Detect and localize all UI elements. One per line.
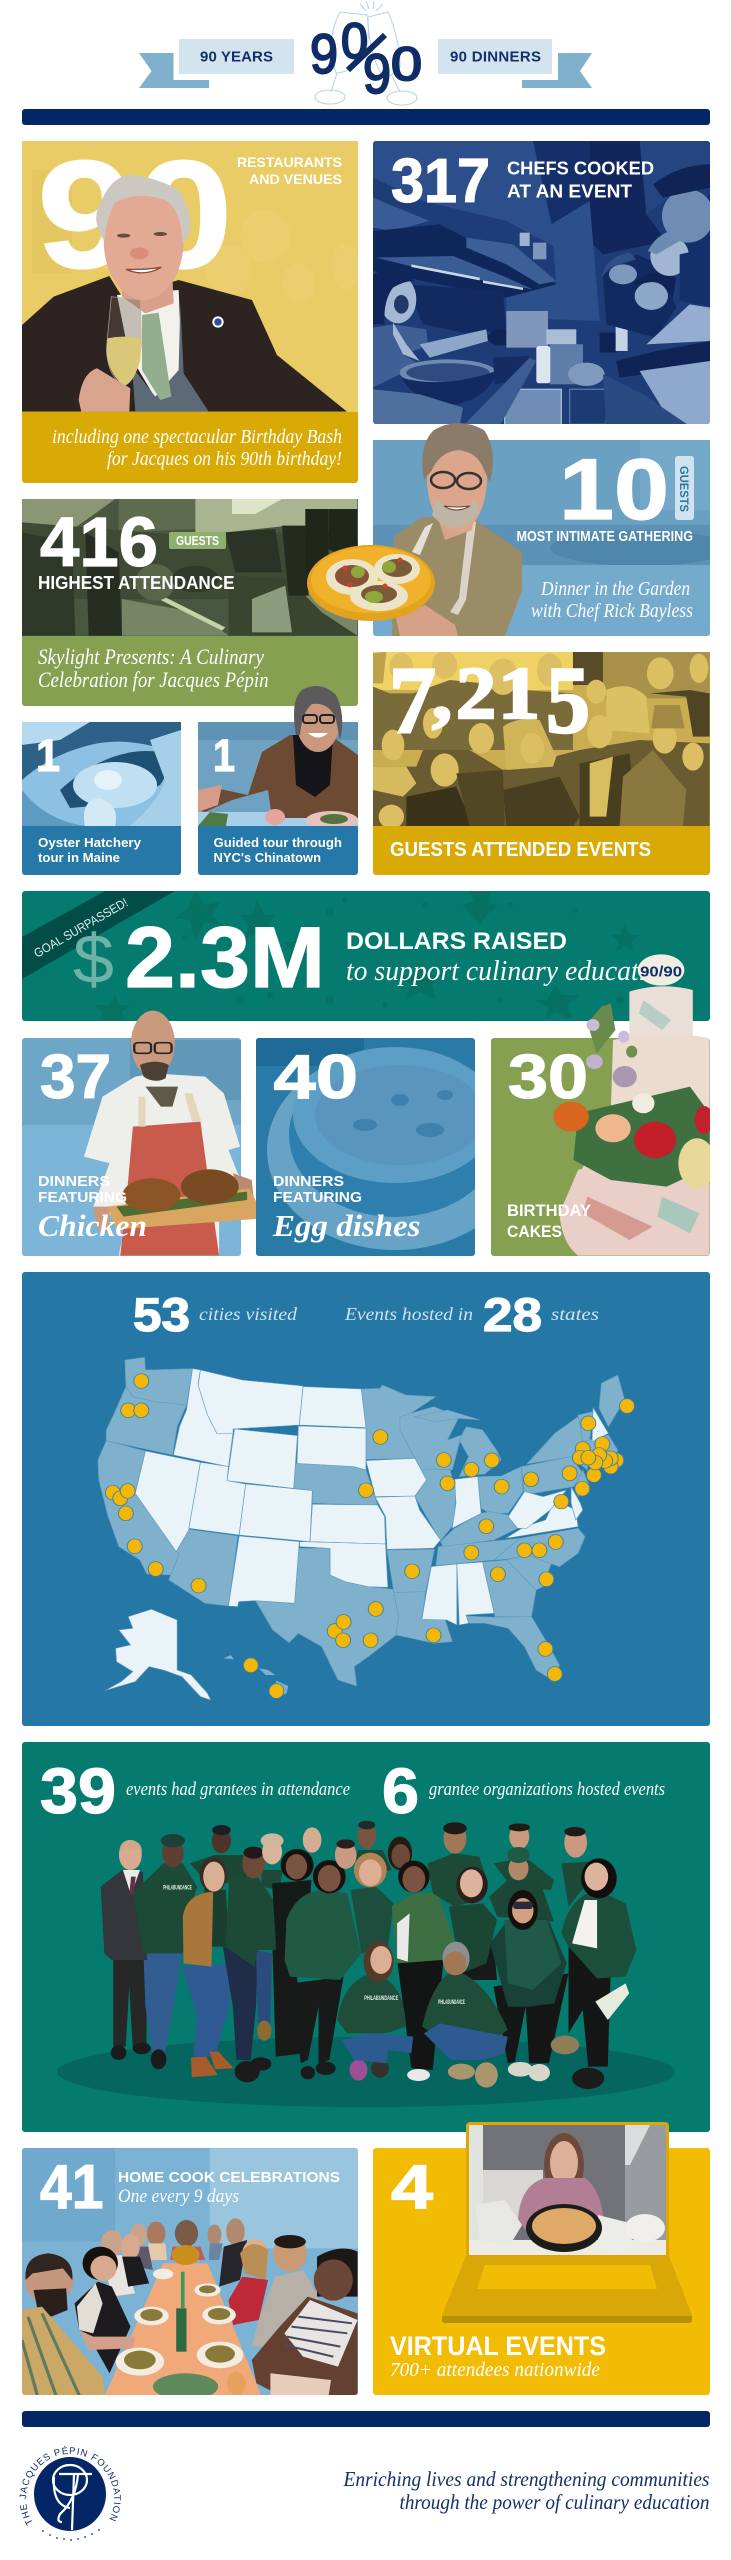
panel: grantees — [22, 1742, 710, 2132]
label: birthday cakes — [507, 1202, 591, 1241]
label: dinners featuring egg dishes: Egg dishes — [272, 1208, 420, 1243]
panel: 10 most intimate gathering — [307, 423, 730, 636]
suit — [101, 1870, 147, 1960]
panel: 416 highest attendance: 416 — [40, 503, 158, 581]
number: 7,215 — [389, 647, 590, 753]
unvisited states — [105, 1369, 608, 1700]
panel: 2.3M dollars raised — [22, 891, 710, 1021]
text: dinner in the garden: with Chef Rick Bayless — [531, 600, 693, 622]
label: restaurants and venues — [237, 154, 342, 187]
hand — [79, 368, 130, 412]
table — [105, 2263, 261, 2395]
neck and head — [122, 281, 174, 314]
photo background — [22, 141, 358, 412]
caption: oyster hatchery tour: Oyster Hatchery — [38, 836, 141, 850]
containers — [506, 311, 548, 348]
person: woman in leopard coat — [198, 686, 358, 829]
laptop screen: cooking demo — [469, 2125, 666, 2255]
trays — [505, 389, 561, 426]
footer: skylight presents: Skylight Presents: A Culinary — [38, 644, 264, 669]
banner: goal surpassed — [22, 891, 175, 979]
woman — [373, 324, 428, 388]
stat: 39 events: events had grantees in attendance — [126, 1779, 350, 1800]
group photo: PHILABUNDANCE — [438, 1999, 465, 2006]
panel: 2.3M dollars raised: DOLLARS RAISED — [346, 928, 567, 955]
footer: skylight presents — [22, 636, 358, 706]
panel: 41 home cook celebrations — [22, 2148, 359, 2400]
label: virtual events — [390, 2331, 606, 2381]
floor shadow — [57, 2037, 675, 2107]
stats row — [133, 1288, 599, 1341]
dinner party photo — [22, 2148, 359, 2400]
label: dinners featuring egg dishes — [272, 1174, 420, 1243]
icon: champagne glasses — [315, 1, 417, 105]
ribbon tail: right — [522, 53, 592, 88]
panel: 40 dinners featuring egg dishes: 40 — [274, 1043, 358, 1112]
icon: taco plate — [307, 545, 435, 621]
bottom left counter — [373, 389, 463, 426]
panel: 90 restaurants and venues: 90 — [37, 129, 233, 300]
pin — [212, 316, 224, 328]
label: 90 years — [179, 39, 294, 74]
top divider bar — [22, 109, 710, 125]
tagline — [343, 2467, 710, 2514]
stat: 39 events — [40, 1755, 350, 1827]
map of states — [98, 1357, 634, 1700]
panel: 10 most intimate gathering: 10 — [559, 442, 669, 538]
number: 7,215: 1 — [498, 653, 540, 735]
label: birthday cakes: BIRTHDAY — [507, 1202, 591, 1220]
faint crowd — [205, 210, 359, 303]
logo: 90/90: 9 — [310, 22, 338, 85]
label: home cook celebrations: HOME COOK CELEBRATIONS — [118, 2169, 340, 2186]
tagline: Enriching lives and strengthening communities — [343, 2467, 710, 2491]
panel: 30 birthday cakes — [491, 954, 716, 1256]
label: birthday cakes: CAKES — [507, 1223, 562, 1241]
Hawaii — [273, 1681, 288, 1697]
label: restaurants and venues: RESTAURANTS — [237, 154, 342, 170]
panel: 416 highest attendance — [22, 499, 358, 706]
caption: guided tour — [198, 826, 358, 875]
label: dinners featuring chicken: FEATURING — [38, 1190, 127, 1206]
stat: 39 events: 39 — [40, 1755, 116, 1827]
footer: skylight presents: Celebration for Jacques Pépin — [38, 667, 268, 692]
panel: 40 dinners featuring egg dishes — [256, 1038, 475, 1256]
vest — [132, 303, 209, 412]
footer: birthday bash — [22, 412, 358, 483]
icon: laptop — [442, 2122, 692, 2323]
ribbon tail: left — [139, 53, 209, 88]
panel: US map — [22, 1272, 710, 1726]
footer: birthday bash: for Jacques on his 90th birthday! — [107, 448, 342, 470]
panel: 4 virtual events — [373, 2122, 710, 2395]
star pattern — [95, 891, 640, 1021]
icon: plate — [267, 1070, 475, 1250]
icon: quiche — [289, 1112, 475, 1217]
panel: 2.3M dollars raised: to support culinary education — [346, 956, 674, 987]
number: 7,215: 7 — [389, 647, 436, 753]
stats row: Events hosted in — [344, 1304, 473, 1324]
label: dinners featuring egg dishes: DINNERS — [273, 1174, 344, 1190]
label: 90 years: 90 YEARS — [200, 48, 273, 66]
panel: 317 chefs — [373, 141, 714, 426]
stat: 6 organizations: grantee organizations hosted events — [429, 1779, 665, 1800]
heads — [119, 1840, 142, 1870]
main torsos — [133, 1863, 197, 1953]
stats row: 53 — [133, 1288, 190, 1341]
logo: 90/90: 0 — [341, 13, 368, 69]
stat: 6 organizations — [382, 1755, 665, 1827]
shirt logos: PHILABUNDANCE — [163, 1885, 192, 1891]
left man — [24, 2268, 74, 2300]
panel: guided Chinatown tour: 1 — [213, 730, 235, 781]
caption: oyster hatchery tour: tour in Maine — [38, 851, 120, 865]
logo: 90/90 — [310, 13, 422, 105]
tie — [142, 313, 171, 400]
footer: guests attended events — [373, 826, 710, 875]
icon: birthday cake with flowers — [553, 954, 716, 1256]
crouching — [337, 1973, 406, 2033]
label: dinners featuring chicken — [38, 1174, 147, 1243]
legs — [113, 1960, 147, 2050]
stats row: 28 — [483, 1288, 542, 1341]
label: guests pill: GUESTS — [176, 534, 219, 548]
label: guests vertical pill — [675, 456, 694, 520]
stat: 6 organizations: 6 — [382, 1755, 419, 1827]
panel: oyster hatchery — [22, 722, 181, 875]
Alaska — [105, 1609, 211, 1700]
number: 7,215: 5 — [546, 647, 590, 753]
right woman — [317, 2248, 358, 2297]
text: dinner in the garden: Dinner in the Garden — [540, 578, 690, 600]
label: home cook celebrations: One every 9 days — [118, 2186, 239, 2207]
header banner — [139, 1, 592, 105]
city markers — [105, 1374, 634, 1698]
banner: goal surpassed: GOAL SURPASSED! — [32, 895, 130, 961]
label: 90 dinners: 90 DINNERS — [450, 48, 541, 66]
bottom divider bar — [22, 2411, 710, 2427]
shoes — [111, 2042, 604, 2089]
panel: 317 chefs: 317 — [391, 147, 490, 216]
label: chefs cooked — [507, 158, 654, 202]
label: dinners featuring chicken: Chicken — [38, 1208, 147, 1243]
footer: birthday bash: including one spectacular Birthday Bash — [52, 426, 342, 448]
panel: guided Chinatown tour — [198, 686, 358, 875]
visited states — [98, 1357, 625, 1697]
logo: 90/90: 9 — [363, 42, 391, 105]
person: Rick Bayless — [392, 423, 522, 636]
label: virtual events: 700+ attendees nationwide — [390, 2359, 600, 2381]
logo: Jacques Pepin Foundation: THE JACQUES PÉPIN FOUNDATION — [20, 2446, 121, 2526]
chefs at right — [603, 254, 676, 338]
shirt logos: PHILABUNDANCE — [364, 1995, 398, 2002]
panel: 4 virtual events: 4 — [391, 2153, 434, 2222]
logo: 90/90: 0 — [391, 37, 422, 90]
label: guests vertical pill: GUESTS — [677, 466, 691, 512]
icon: birthday cake with flowers: 90/90 — [640, 963, 682, 980]
label: virtual events: VIRTUAL EVENTS — [390, 2331, 606, 2361]
plates — [116, 2269, 243, 2376]
panel: 41 home cook celebrations: 41 — [40, 2153, 104, 2222]
staff behind — [406, 284, 506, 333]
footer: guests attended events: GUESTS ATTENDED EVENTS — [390, 839, 651, 861]
faces — [379, 651, 708, 829]
jacket — [22, 276, 347, 412]
label: home cook celebrations — [118, 2169, 340, 2207]
caption: guided tour: Guided tour through — [214, 836, 342, 850]
stats row: states — [551, 1304, 599, 1324]
label: dinners featuring egg dishes: FEATURING — [273, 1190, 362, 1206]
person: chef with roast chicken — [84, 1011, 265, 1256]
left woman — [83, 2247, 118, 2280]
caption: guided tour: NYC's Chinatown — [214, 851, 321, 865]
label: chefs cooked: CHEFS COOKED — [507, 158, 654, 178]
tagline: through the power of culinary education — [400, 2490, 710, 2514]
panel: oyster hatchery: 1 — [36, 730, 60, 781]
label: chefs cooked: AT AN EVENT — [507, 182, 632, 202]
panel: 416 highest attendance: HIGHEST ATTENDANCE — [38, 573, 234, 593]
panel: 37 dinners featuring chicken — [22, 1011, 265, 1256]
back diners — [175, 2220, 198, 2247]
shirt logos — [163, 1885, 465, 2006]
presenter — [544, 2133, 584, 2197]
caption: oyster hatchery tour — [22, 826, 181, 875]
label: 90 dinners — [438, 39, 552, 74]
panel: 37 dinners featuring chicken: 37 — [40, 1043, 111, 1112]
number: 7,215: , — [432, 654, 452, 734]
text: dinner in the garden — [531, 578, 693, 622]
number: 7,215: 2 — [456, 653, 496, 735]
panel: 10 most intimate gathering: MOST INTIMATE GATHERING — [516, 528, 693, 545]
bowl — [400, 359, 494, 382]
label: restaurants and venues: AND VENUES — [249, 171, 342, 187]
group photo — [101, 1821, 636, 2089]
stats row: cities visited — [199, 1304, 298, 1324]
shirt — [117, 290, 183, 398]
panel: 2.3M dollars raised: 2.3M — [125, 910, 325, 1006]
label: dinners featuring chicken: DINNERS — [38, 1174, 110, 1190]
panel: 90 restaurants and venues — [22, 129, 359, 483]
panel: 7,215 guests — [373, 647, 710, 875]
champagne glass — [106, 297, 141, 386]
panel: 30 birthday cakes: 30 — [508, 1043, 588, 1112]
panel: 2.3M dollars raised: $ — [73, 920, 114, 998]
